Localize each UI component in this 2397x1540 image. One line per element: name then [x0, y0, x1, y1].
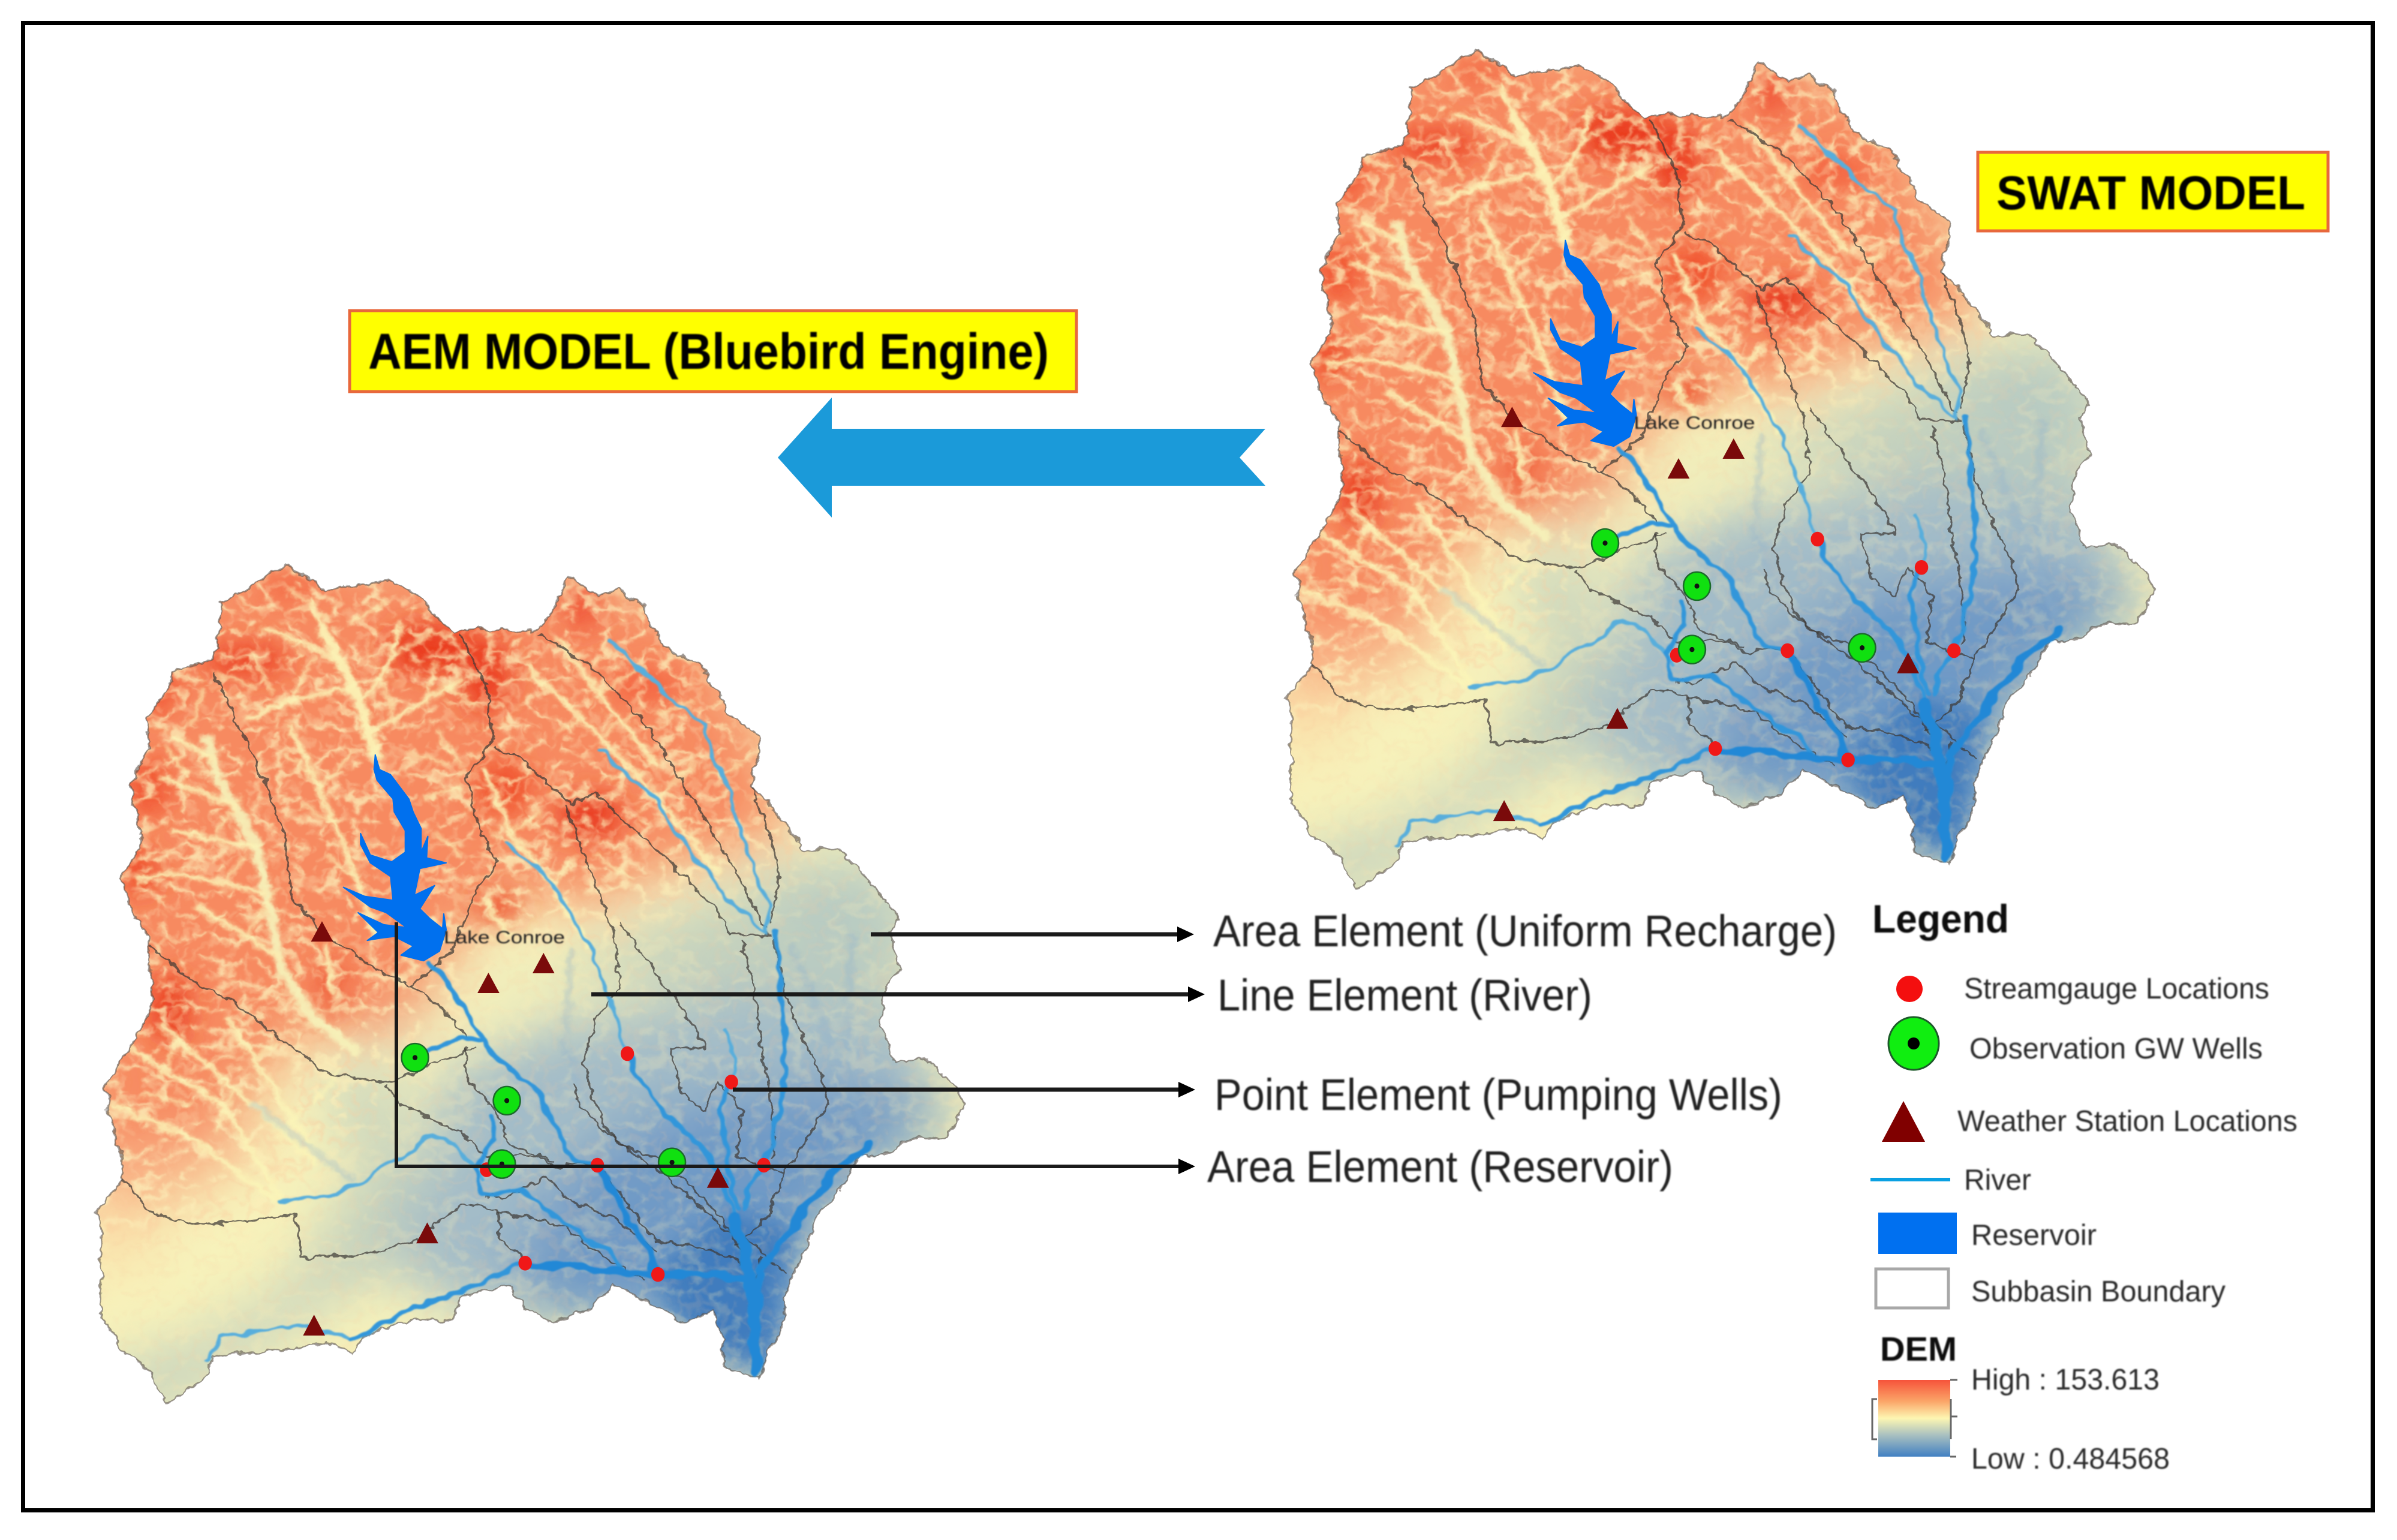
legend — [1870, 897, 2297, 1475]
legend: reservoir — [1878, 1213, 2097, 1254]
legend: streamgauge: Streamgauge Locations — [1964, 973, 2269, 1005]
leader lines to element labels — [396, 922, 1205, 1174]
legend: DEM high: High : 153.613 — [1971, 1364, 2160, 1396]
arrow: reservoir — [396, 922, 1195, 1174]
legend: reservoir: Reservoir — [1971, 1219, 2097, 1252]
legend: wells: Observation GW Wells — [1969, 1033, 2263, 1065]
legend: weather stations — [1882, 1101, 2297, 1142]
heading: SWAT model — [1978, 152, 2328, 231]
label: Lake Conroe: Lake Conroe — [1634, 413, 1755, 433]
observation wells — [402, 1043, 685, 1178]
legend: wells — [1888, 1017, 2263, 1070]
legend: DEM low: Low : 0.484568 — [1971, 1443, 2170, 1475]
map: AEM model basin — [57, 527, 1012, 1433]
legend title: Legend — [1872, 897, 2009, 941]
legend: weather stations: Weather Station Locations — [1957, 1105, 2297, 1138]
streamgauge markers — [1670, 532, 1960, 767]
streamgauge markers — [480, 1046, 771, 1282]
legend: DEM title: DEM — [1880, 1330, 1957, 1368]
arrow: river — [591, 986, 1205, 1002]
heading: SWAT model: SWAT MODEL — [1996, 166, 2305, 219]
observation wells — [1592, 529, 1876, 664]
element labels: Point Element (Pumping Wells) — [1214, 1070, 1782, 1120]
heading: AEM model: AEM MODEL (Bluebird Engine) — [368, 323, 1049, 380]
element labels: Area Element (Uniform Recharge) — [1213, 906, 1837, 956]
element labels: Area Element (Reservoir) — [1207, 1142, 1673, 1192]
map: SWAT model basin — [1247, 13, 2201, 919]
label: Lake Conroe: Lake Conroe — [444, 928, 565, 948]
legend: subbasin boundary — [1876, 1269, 2225, 1308]
legend: subbasin boundary: Subbasin Boundary — [1971, 1276, 2225, 1308]
element labels: Line Element (River) — [1217, 970, 1592, 1020]
legend: river: River — [1964, 1164, 2031, 1196]
weather stations — [303, 921, 729, 1336]
arrow: pumping wells — [733, 1082, 1195, 1097]
arrow: uniform recharge — [871, 927, 1194, 942]
heading: AEM model — [350, 311, 1076, 392]
element labels — [1207, 906, 1837, 1192]
weather stations — [1493, 407, 1919, 821]
arrow: SWAT to AEM — [778, 398, 1265, 518]
legend: DEM ramp — [1872, 1380, 1957, 1457]
